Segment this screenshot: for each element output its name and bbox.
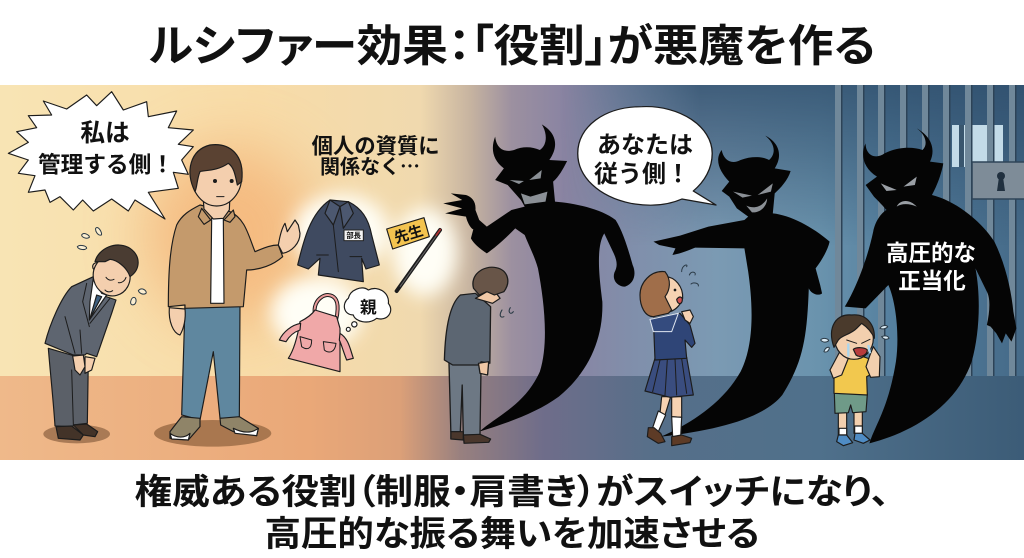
panel: illustrated scene bbox=[0, 85, 1024, 460]
text: you obey bbox=[594, 132, 693, 188]
orange glow behind the man bbox=[145, 145, 315, 325]
burst speech bubble: 管理する側！ bbox=[38, 151, 174, 177]
schoolgirl in sailor uniform bbox=[640, 265, 698, 446]
speech bubble: you obey bbox=[578, 107, 716, 205]
icon: pink apron bbox=[279, 295, 353, 372]
devil label: 高圧的な bbox=[886, 241, 976, 266]
caption: regardless of personal qualities: 個人の資質に bbox=[312, 135, 440, 159]
floor background bbox=[0, 376, 1024, 460]
bottom caption bbox=[134, 473, 890, 554]
burst speech bubble bbox=[8, 92, 193, 219]
bowing man in suit bbox=[43, 228, 146, 443]
bottom caption: 高圧的な振る舞いを加速させる bbox=[264, 515, 760, 554]
bottom caption: 権威ある役割（制服・肩書き）がスイッチになり、 bbox=[134, 473, 890, 512]
thought bubble: parent bbox=[344, 288, 391, 331]
text: you obey: 従う側！ bbox=[594, 161, 690, 188]
icon: teacher pointer bbox=[397, 229, 441, 291]
wall background bbox=[0, 85, 1024, 377]
devil shadows, bubble and back-facing man bbox=[443, 107, 1016, 443]
icon: teacher sign: 先生 bbox=[392, 222, 425, 247]
bubble text: 私は bbox=[80, 119, 130, 147]
devil label: 正当化 bbox=[898, 269, 966, 294]
devil shadow 1 bbox=[443, 124, 634, 432]
caption: regardless of personal qualities: 関係なく… bbox=[320, 151, 420, 180]
icon: suit jacket with name tag: 部長 bbox=[346, 231, 362, 240]
left half illustrations bbox=[43, 228, 146, 443]
man in suit from behind bbox=[444, 267, 513, 443]
icon: suit jacket with name tag bbox=[298, 200, 379, 282]
devil shadow 3 bbox=[845, 128, 1016, 443]
white glow behind role items bbox=[271, 194, 457, 349]
devil shadow 2 bbox=[653, 136, 830, 437]
wall top shading bbox=[576, 85, 1024, 225]
caption: regardless of personal qualities bbox=[312, 135, 440, 180]
crying boy bbox=[821, 315, 889, 446]
devil label bbox=[886, 241, 976, 294]
prison bars and lock bbox=[835, 85, 1024, 376]
title: ルシファー効果：「役割」が悪魔を作る bbox=[148, 22, 876, 71]
thought bubble: parent: 親 bbox=[360, 298, 377, 317]
standing man in tan jacket bbox=[154, 145, 300, 447]
standing figure and role items bbox=[8, 92, 441, 447]
icon: teacher sign bbox=[387, 218, 429, 249]
text: you obey: あなたは bbox=[597, 132, 693, 159]
